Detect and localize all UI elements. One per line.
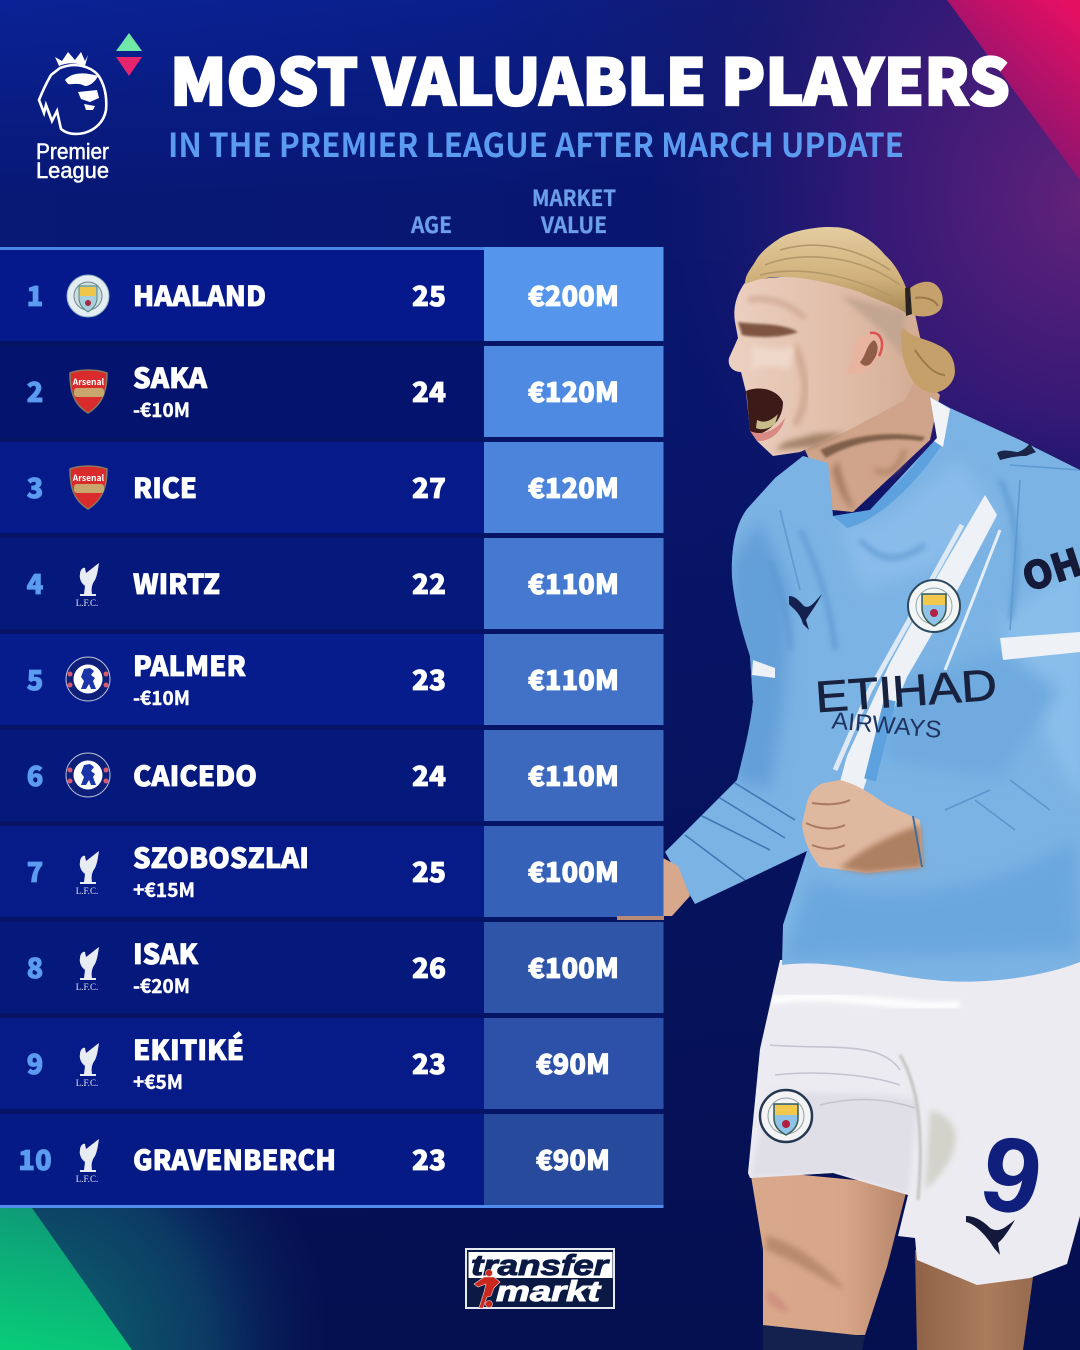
row 4 xyxy=(0,538,664,629)
crest: Liverpool xyxy=(76,1139,99,1184)
market value: €200M xyxy=(528,274,619,314)
market value: €120M xyxy=(528,466,619,506)
crest: Liverpool xyxy=(76,563,99,608)
rank: 8 xyxy=(27,946,43,986)
crest: Arsenal xyxy=(70,466,107,509)
player name: -€10M xyxy=(133,682,190,711)
market value: €90M xyxy=(536,1042,610,1082)
player name xyxy=(133,1028,244,1095)
age: 23 xyxy=(412,658,446,698)
logo: transfermarkt xyxy=(465,1248,615,1309)
crest: Liverpool: L.F.C. xyxy=(76,1078,98,1088)
right leg xyxy=(915,1250,1034,1350)
shading xyxy=(730,520,790,790)
logo: transfermarkt: transfer xyxy=(471,1250,610,1282)
rank: 7 xyxy=(27,850,43,890)
shorts xyxy=(748,950,1080,1285)
crest: Chelsea xyxy=(66,657,110,701)
collar band xyxy=(828,432,945,528)
crest: Arsenal: Arsenal xyxy=(72,376,105,388)
market value: €100M xyxy=(528,946,619,986)
crest: Liverpool: L.F.C. xyxy=(76,886,98,896)
rank: 1 xyxy=(27,274,43,314)
player name xyxy=(133,836,309,903)
hair xyxy=(745,227,955,393)
ear xyxy=(845,333,882,374)
ranking table xyxy=(0,247,664,1208)
player name: WIRTZ xyxy=(133,562,220,602)
player name xyxy=(133,356,208,423)
row 5 xyxy=(0,634,664,725)
player name xyxy=(133,644,246,711)
crest: Liverpool xyxy=(76,1043,99,1088)
player name: +€5M xyxy=(133,1066,183,1095)
player name: +€15M xyxy=(133,874,195,903)
rank: 2 xyxy=(27,370,43,410)
logo wordmark: League xyxy=(36,158,109,183)
left leg xyxy=(750,1170,908,1350)
jersey xyxy=(665,397,1080,982)
age: 25 xyxy=(412,850,446,890)
logo wordmark xyxy=(36,139,109,183)
hand sliver between rows xyxy=(617,916,664,920)
player name: HAALAND xyxy=(133,274,266,314)
crest: Liverpool: L.F.C. xyxy=(76,1174,98,1184)
lion face xyxy=(65,73,99,110)
player illustration xyxy=(660,227,1080,1350)
crest: Liverpool: L.F.C. xyxy=(76,982,98,992)
crest: Liverpool: L.F.C. xyxy=(76,598,98,608)
rank: 6 xyxy=(27,754,43,794)
column header: age: AGE xyxy=(410,208,452,240)
shorts number: 9 xyxy=(972,1113,1051,1239)
row 8 xyxy=(0,922,664,1013)
age: 23 xyxy=(412,1042,446,1082)
rank: 9 xyxy=(27,1042,43,1082)
mouth xyxy=(746,388,785,441)
column header: market value xyxy=(532,181,616,240)
logo: transfermarkt: markt xyxy=(496,1276,602,1308)
rank: 10 xyxy=(18,1138,52,1178)
subtitle: IN THE PREMIER LEAGUE AFTER MARCH UPDATE xyxy=(168,119,904,167)
crest: Liverpool xyxy=(76,851,99,896)
head xyxy=(729,270,925,456)
row 9 xyxy=(0,1018,664,1109)
player name xyxy=(133,932,199,999)
player name: CAICEDO xyxy=(133,754,257,794)
player name: ISAK xyxy=(133,932,199,972)
row 3 xyxy=(0,442,664,533)
rank: 4 xyxy=(27,562,44,602)
player name: EKITIKÉ xyxy=(133,1028,244,1068)
player name: GRAVENBERCH xyxy=(133,1138,336,1178)
jaw stubble xyxy=(775,432,845,450)
age: 26 xyxy=(412,946,446,986)
icon: red footballer xyxy=(474,1270,500,1308)
jersey sponsor: ETIHAD xyxy=(814,661,999,722)
age: 24 xyxy=(412,754,446,794)
white collar flash xyxy=(930,397,950,447)
row 1 xyxy=(0,247,664,341)
crest: Liverpool xyxy=(76,947,99,992)
market value: €110M xyxy=(528,562,619,602)
market value: €90M xyxy=(536,1138,610,1178)
logo: Premier League xyxy=(36,52,109,183)
crest: Manchester City xyxy=(67,275,109,317)
crown xyxy=(55,52,88,66)
crest: Chelsea xyxy=(66,753,110,797)
icon: up and down arrows xyxy=(116,33,142,76)
sleeve folds xyxy=(685,780,795,880)
market value: €100M xyxy=(528,850,619,890)
rank: 3 xyxy=(27,466,43,506)
right fist xyxy=(802,780,923,873)
age: 27 xyxy=(412,466,446,506)
jersey crest xyxy=(908,580,960,632)
crest: Arsenal: Arsenal xyxy=(72,472,105,484)
title: MOST VALUABLE PLAYERS xyxy=(170,32,1010,124)
player name: PALMER xyxy=(133,644,246,684)
rank: 5 xyxy=(27,658,43,698)
sleeve bands xyxy=(1000,632,1080,660)
neck xyxy=(805,360,940,512)
market value: €120M xyxy=(528,370,619,410)
player name: RICE xyxy=(133,466,197,506)
player name: -€10M xyxy=(133,394,190,423)
left hand xyxy=(660,858,690,916)
white sash xyxy=(835,495,997,800)
age: 23 xyxy=(412,1138,446,1178)
row 6 xyxy=(0,730,664,821)
row 7 xyxy=(0,826,664,917)
shoulder maker logo xyxy=(997,443,1036,460)
chest maker logo xyxy=(789,594,822,630)
age: 22 xyxy=(412,562,446,602)
row 10 xyxy=(0,1114,664,1205)
player name: SZOBOSZLAI xyxy=(133,836,309,876)
row 2 xyxy=(0,346,664,437)
brow shadow xyxy=(738,322,798,337)
logo wordmark: Premier xyxy=(36,139,109,164)
player name: SAKA xyxy=(133,356,208,396)
age: 24 xyxy=(412,370,446,410)
column header: market value: VALUE xyxy=(540,208,607,240)
age: 25 xyxy=(412,274,446,314)
shorts maker logo xyxy=(966,1216,1015,1255)
market value: €110M xyxy=(528,754,619,794)
crest: Arsenal xyxy=(70,370,107,413)
jersey sponsor second line: AIRWAYS xyxy=(831,707,943,744)
player name: -€20M xyxy=(133,970,190,999)
lion head xyxy=(39,65,106,134)
market value: €110M xyxy=(528,658,619,698)
shorts badge xyxy=(760,1090,812,1142)
column header: market value: MARKET xyxy=(532,181,616,213)
shaved side xyxy=(840,295,905,360)
